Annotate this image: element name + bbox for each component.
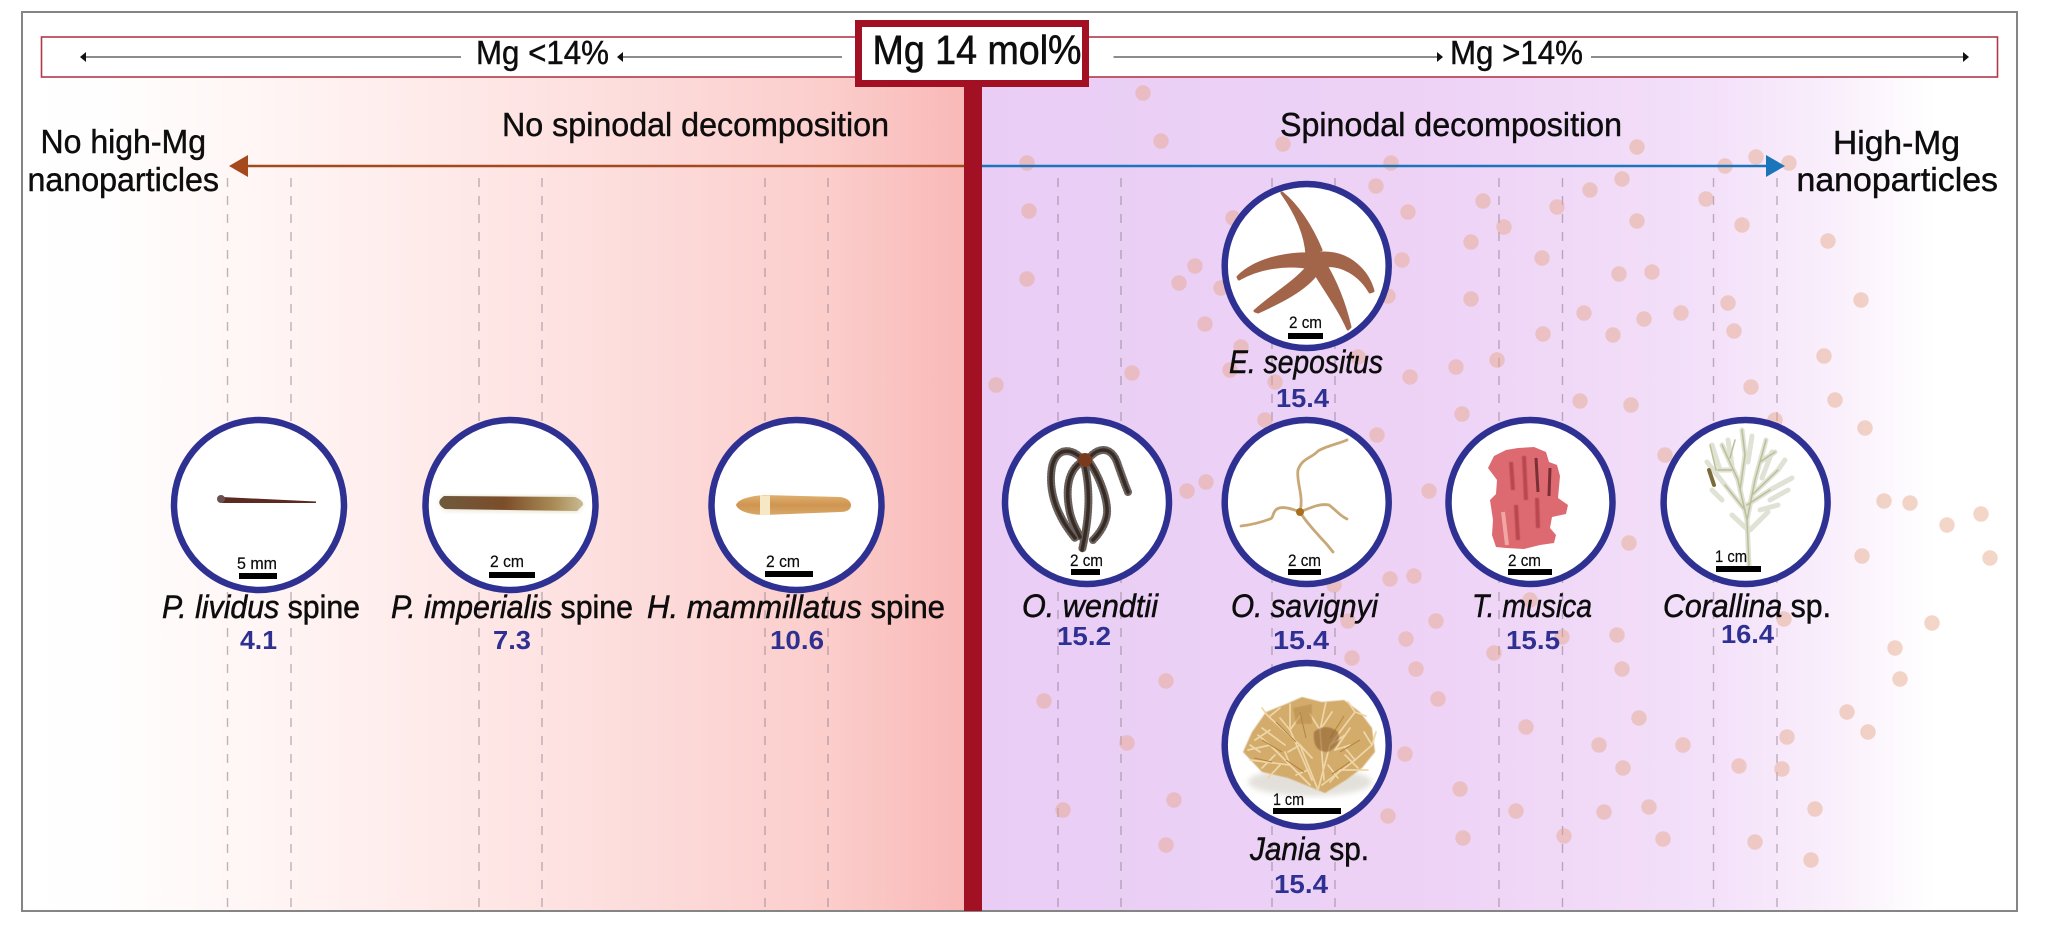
starfish photo [1238,193,1373,329]
specimen: O. savignyi [1225,420,1389,655]
label: high-Mg nanoparticles: High-Mg [1833,124,1960,161]
value: 15.2 [1057,621,1111,651]
scale bar 2 cm [765,552,813,577]
value: 4.1 [240,625,277,655]
specimen: Corallina [1663,420,1831,649]
value: 15.4 [1273,625,1330,655]
top range bar [42,34,1998,77]
panel: spinodal background [982,77,2017,911]
value: 16.4 [1721,619,1775,649]
threshold box [858,24,1086,84]
arrow: towards no nanoparticles [229,155,964,177]
scale bar 2 cm: 2 cm [1070,551,1103,570]
name: T. musica [1472,588,1592,624]
specimen: P. lividus [162,420,360,655]
specimen: O. wendtii [1005,420,1169,651]
arrow: Mg above 14 near centre [1114,52,1443,62]
specimen: Jania [1225,663,1389,899]
label: high-Mg nanoparticles: nanoparticles [1796,161,1998,198]
label: Mg above 14: Mg >14% [1450,34,1583,71]
coralline alga photo [1707,430,1792,566]
arrow: Mg below 14 far left [80,52,461,62]
label: no high-Mg nanoparticles [28,123,219,198]
arrow: Mg above 14 far right [1591,52,1969,62]
organ pipe coral photo [1488,447,1568,549]
name: E. sepositus [1229,344,1383,380]
scale bar 2 cm: 2 cm [1508,551,1541,570]
label: no high-Mg nanoparticles: No high-Mg [40,123,206,160]
feather star photo [1051,450,1128,550]
heading: spinodal decomposition: Spinodal decomposition [1280,106,1622,143]
name: Corallina sp. [1663,588,1831,624]
brittle star photo [1241,440,1347,552]
value: 7.3 [493,625,531,655]
name: O. wendtii [1022,588,1159,624]
spine photo [217,495,316,503]
jania photo [1243,697,1376,796]
spine photo [439,496,583,512]
heading: no spinodal decomposition: No spinodal decomposition [502,106,889,143]
scale bar 2 cm: 2 cm [766,552,800,571]
scale bar 2 cm: 2 cm [490,552,524,571]
scale bar 1 cm: 1 cm [1273,790,1304,809]
scale bar 2 cm: 2 cm [1289,313,1322,332]
arrow: Mg below 14 near centre [617,52,842,62]
scale bar 1 cm [1715,547,1761,572]
dashed guide lines [228,178,1777,911]
arrow: towards nanoparticles [982,155,1785,177]
scale bar 2 cm [1508,551,1552,575]
scale bar 1 cm [1273,790,1341,814]
label: high-Mg nanoparticles [1796,124,1998,198]
specimen: T. musica [1448,420,1612,655]
value: 10.6 [770,625,824,655]
value: 15.4 [1274,869,1329,899]
scale bar 2 cm: 2 cm [1288,551,1321,570]
nanoparticle dots [988,85,1998,868]
scale bar 2 cm [1288,313,1323,339]
specimen: P. imperialis [391,420,633,655]
spine photo [736,495,851,515]
label: no high-Mg nanoparticles: nanoparticles [28,161,219,198]
scale bar 5 mm: 5 mm [237,554,277,573]
value: 15.5 [1506,625,1560,655]
value: 15.4 [1276,383,1330,413]
name: H. mammillatus spine [647,589,945,625]
scale bar 2 cm [489,552,535,578]
threshold text: Mg 14 mol% [872,27,1082,73]
name: P. lividus spine [162,589,360,625]
name: P. imperialis spine [391,589,633,625]
central divider bar [964,80,982,911]
label: Mg below 14: Mg <14% [476,34,609,71]
specimen: E. sepositus [1225,184,1389,413]
scale bar 1 cm: 1 cm [1715,547,1747,566]
panel: no spinodal background [22,77,964,911]
name: O. savignyi [1231,588,1379,624]
specimen: H. mammillatus [647,420,945,655]
name: Jania sp. [1249,831,1369,867]
